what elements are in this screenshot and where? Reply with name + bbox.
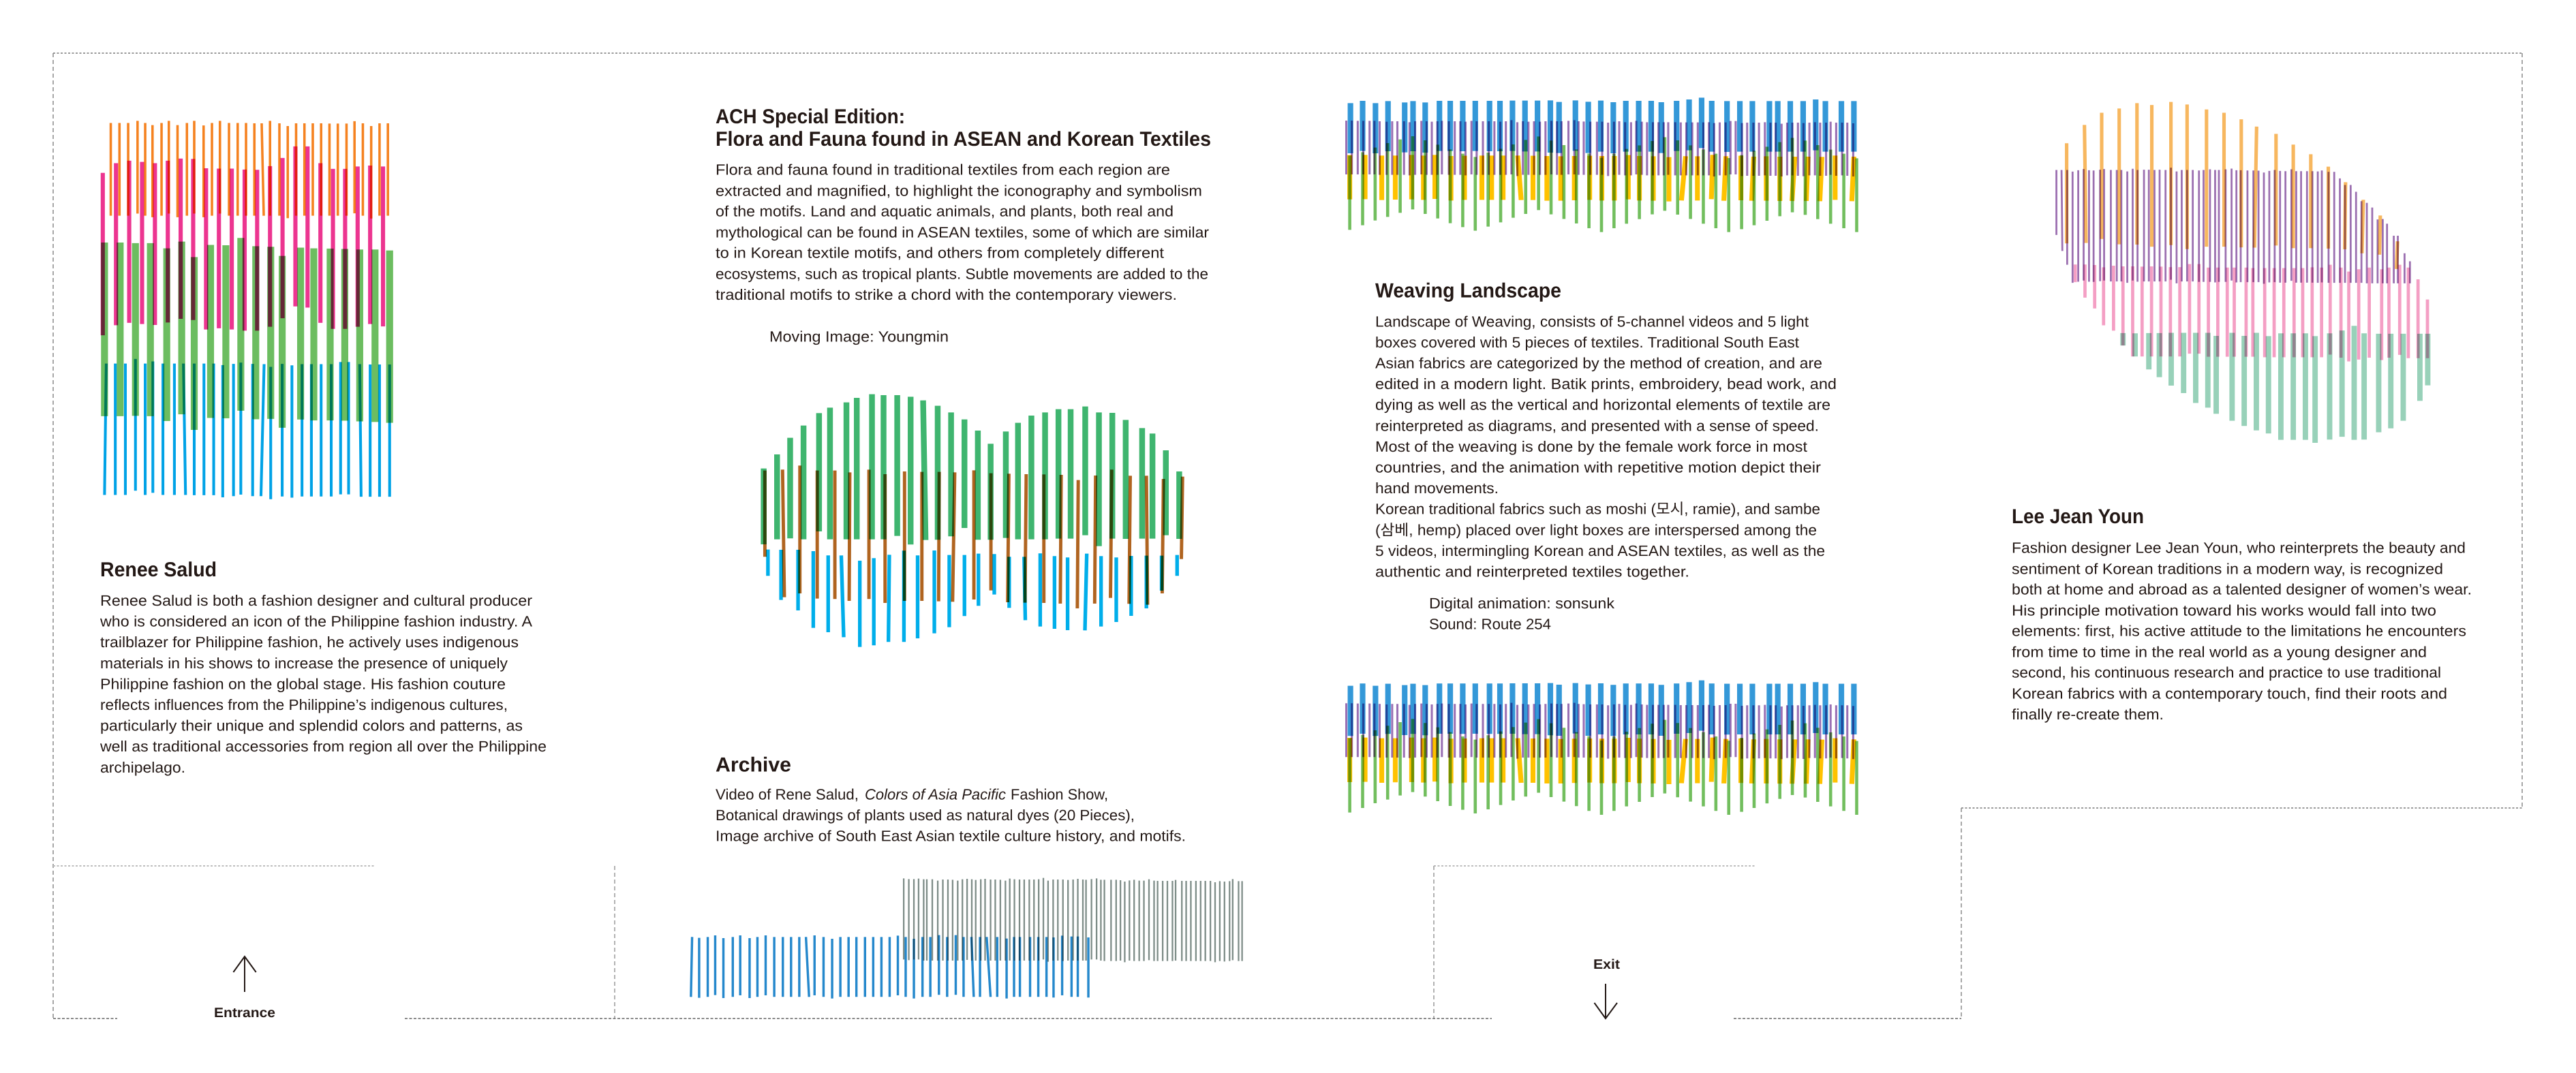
label: Entrance: Entrance: [214, 1006, 275, 1021]
text block: Weaving Landscape: boxes covered with 5 pieces of textiles. Traditional South East: [1375, 334, 1799, 351]
text block: Lee Jean Youn: sentiment of Korean traditions in a modern way, is recognized: [2012, 560, 2443, 577]
text block: Renee Salud: Philippine fashion on the global stage. His fashion couture: [100, 675, 506, 692]
text block: Weaving Landscape: Digital animation: sonsunk: [1429, 595, 1615, 612]
text block: Weaving Landscape: Korean traditional fabrics such as moshi (모시, ramie), and sambe: [1375, 501, 1820, 518]
text block: ACH Special Edition: Flora and Fauna found in ASEAN and Korean Textiles: [716, 128, 1211, 151]
text block: Renee Salud: materials in his shows to increase the presence of uniquely: [100, 655, 508, 672]
text block: Lee Jean Youn: both at home and abroad as a talented designer of women’s wear.: [2012, 581, 2472, 598]
text block: ACH Special Edition: to in Korean textile motifs, and others from completely different: [716, 245, 1164, 262]
text block: Weaving Landscape: Landscape of Weaving, consists of 5-channel videos and 5 light: [1375, 313, 1809, 330]
text block: Weaving Landscape: Most of the weaving is done by the female work force in most: [1375, 438, 1807, 455]
text block: ACH Special Edition: Flora and fauna found in traditional textiles from each region are: [716, 161, 1170, 178]
motif: Lee Jean Youn curved bars: [2057, 102, 2427, 443]
text block: Renee Salud: particularly their unique and splendid colors and patterns, as: [100, 717, 523, 734]
text block: Weaving Landscape: authentic and reinterpreted textiles together.: [1375, 563, 1689, 580]
text block: Weaving Landscape: dying as well as the vertical and horizontal elements of textile are: [1375, 396, 1830, 414]
text block: ACH Special Edition: ACH Special Edition:: [716, 106, 905, 128]
label: Exit: Exit: [1593, 957, 1620, 972]
text block: Lee Jean Youn: Korean fabrics with a contemporary touch, find their roots and: [2012, 685, 2447, 702]
text block: Lee Jean Youn: Fashion designer Lee Jean Youn, who reinterprets the beauty and: [2012, 540, 2466, 557]
text block: Renee Salud: trailblazer for Philippine fashion, he actively uses indigenous: [100, 634, 519, 651]
text block: ACH Special Edition: [716, 106, 1211, 345]
text block: Lee Jean Youn: from time to time in the real world as a young designer and: [2012, 643, 2427, 660]
text block: Weaving Landscape: Weaving Landscape: [1375, 279, 1561, 302]
text block: Renee Salud: Renee Salud is both a fashion designer and cultural producer: [100, 592, 532, 609]
text block: Weaving Landscape: reinterpreted as diagrams, and presented with a sense of speed.: [1375, 417, 1819, 434]
text block: Renee Salud: well as traditional accessories from region all over the Philippine: [99, 738, 547, 755]
motif: Weaving Landscape top bars: [1347, 97, 1856, 232]
text block: Renee Salud: reflects influences from the Philippine’s indigenous cultures,: [100, 696, 508, 713]
text block: ACH Special Edition: of the motifs. Land and aquatic animals, and plants, both real and: [716, 203, 1174, 220]
text block: Weaving Landscape: [1375, 279, 1837, 633]
motif: Renee Salud textile bars: [103, 121, 390, 499]
text block: Lee Jean Youn: elements: first, his active attitude to the limitations he encounters: [2012, 623, 2466, 640]
text block: Archive: Image archive of South East Asian textile culture history, and motifs.: [716, 828, 1186, 845]
text block: Renee Salud: who is considered an icon of the Philippine fashion industry. A: [99, 613, 532, 630]
text block: ACH Special Edition: Moving Image: Youngmin: [769, 328, 949, 345]
text block: Lee Jean Youn: second, his continuous research and practice to use traditional: [2012, 664, 2441, 681]
text block: Archive: Botanical drawings of plants used as natural dyes (20 Pieces),: [716, 807, 1135, 824]
text block: Archive: Archive: [716, 754, 791, 777]
text block: Weaving Landscape: Sound: Route 254: [1429, 616, 1551, 633]
motif: archive gray and blue bars: [691, 878, 1242, 999]
text block: Weaving Landscape: countries, and the animation with repetitive motion depict their: [1375, 459, 1821, 476]
arrow: entrance: [233, 957, 256, 992]
text block: Renee Salud: archipelago.: [100, 759, 185, 776]
text block: ACH Special Edition: mythological can be found in ASEAN textiles, some of which are similar: [716, 223, 1209, 240]
text block: Lee Jean Youn: finally re-create them.: [2012, 706, 2164, 723]
text block: Renee Salud: Renee Salud: [100, 559, 217, 581]
text block: Weaving Landscape: (삼베, hemp) placed over light boxes are interspersed among the: [1375, 521, 1817, 538]
text block: Archive: Colors of Asia Pacific: [865, 786, 1006, 803]
text block: Lee Jean Youn: [2012, 506, 2472, 723]
text block: Weaving Landscape: Asian fabrics are categorized by the method of creation, and are: [1375, 354, 1822, 372]
text block: Archive: Fashion Show,: [1011, 786, 1108, 803]
text block: Weaving Landscape: 5 videos, intermingling Korean and ASEAN textiles, as well as the: [1375, 542, 1825, 559]
motif: figure-eight flora and fauna bars: [764, 394, 1182, 647]
motif: Weaving Landscape bottom bars: [1347, 681, 1856, 815]
text block: Archive: [716, 754, 1186, 845]
text block: Lee Jean Youn: Lee Jean Youn: [2012, 506, 2144, 528]
text block: ACH Special Edition: ecosystems, such as tropical plants. Subtle movements are added to the: [716, 265, 1208, 282]
text block: Lee Jean Youn: His principle motivation toward his works would fall into two: [2012, 602, 2436, 619]
text block: ACH Special Edition: traditional motifs to strike a chord with the contemporary viewers.: [716, 286, 1177, 303]
text block: ACH Special Edition: extracted and magnified, to highlight the iconography and symbolism: [716, 182, 1202, 199]
arrow: exit: [1595, 984, 1617, 1018]
text block: Weaving Landscape: edited in a modern light. Batik prints, embroidery, bead work, and: [1375, 375, 1837, 392]
text block: Renee Salud: [99, 559, 547, 776]
text block: Weaving Landscape: hand movements.: [1375, 480, 1499, 497]
text block: Archive: Video of Rene Salud,: [716, 786, 859, 803]
